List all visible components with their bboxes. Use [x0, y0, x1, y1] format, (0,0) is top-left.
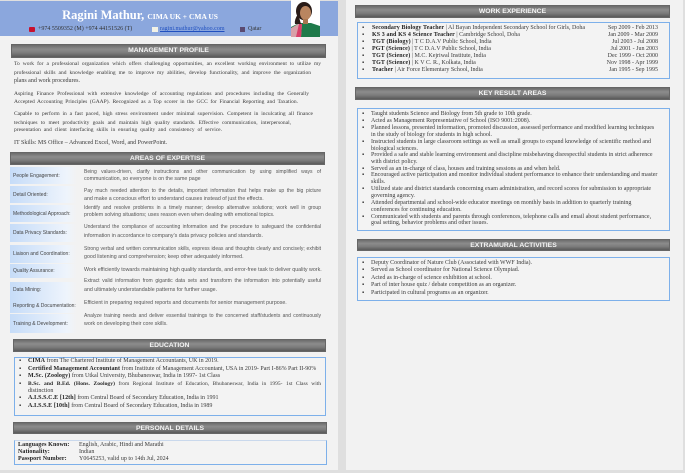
- expertise row: data privacy: [10, 224, 321, 242]
- panel: education list: [14, 357, 326, 416]
- panel: extramural list: [357, 257, 670, 301]
- expertise row: methodological approach: Identify and resolve problems in a timely manner; develop alternative solutions; work well in group: [84, 205, 321, 211]
- panel: key result areas list: Acted as Management Representative of School (ISO 9001:2008).: [371, 118, 530, 124]
- expertise row: training: work on developing their core skills.: [84, 321, 168, 327]
- contact phone: +974 5509352 (M) +974 44151526 (T): [38, 26, 132, 32]
- panel: key result areas list: Encouraged active participation and monitor individual student performance to enhance their understanding and master: [371, 172, 657, 178]
- panel: work experience list: Jan 1995 - Sep 1995: [609, 67, 658, 73]
- panel: work experience list: Teacher | Air Force Elementary School, India: [372, 67, 483, 73]
- panel: extramural list: Deputy Coordinator of Nature Club (Associated with WWF India).: [371, 260, 532, 266]
- panel: extramural list: Served as School coordinator for National Science Olympiad.: [371, 267, 519, 273]
- expertise row: data privacy: Understand the compliance of accounting information and the procedure to safeguard the confidential: [84, 224, 321, 230]
- text: profile: professional skills and knowledge enabling me to improve my abilities, develop functionality, and improve the organization: [14, 70, 311, 76]
- heading: education: EDUCATION: [150, 342, 189, 349]
- text: profile: plans and work procedures.: [14, 78, 80, 84]
- expertise row: detail oriented: [10, 186, 321, 203]
- panel: key result areas list: ▪: [362, 125, 364, 131]
- expertise row: detail oriented: Pay much needed attention to the details, important information that helps make up the big picture: [84, 188, 321, 194]
- text: profile: techniques to meet productivity goals and maintain high quality standards. Effective communication, interpersonal,: [14, 120, 291, 126]
- expertise row: data privacy: Data Privacy Standards:: [13, 230, 67, 236]
- text: profile: Aspiring Finance Professional with extensive knowledge of accounting regulations and procedures including the Generally: [14, 91, 309, 97]
- expertise row: quality assurance: [10, 264, 322, 278]
- panel: extramural list: ▪: [362, 290, 364, 296]
- heading: extramural activities: EXTRAMURAL ACTIVITIES: [470, 242, 557, 249]
- heading: work experience: [355, 5, 670, 18]
- expertise row: data mining: Data Mining:: [13, 287, 41, 293]
- panel: personal details: Passport Number:: [18, 456, 67, 462]
- panel: education list: distinction: [28, 388, 53, 394]
- panel: key result areas list: Utilized state and district standards concerning exam administration, and record scores for submission to appropriate: [371, 186, 651, 192]
- panel: key result areas list: ▪: [362, 139, 364, 145]
- portrait photo: [291, 0, 320, 37]
- heading: areas of expertise: [10, 152, 325, 165]
- panel: work experience list: ▪: [362, 39, 364, 45]
- panel: work experience list: TGT (Science) | M.C. Kejriwal Institute, India: [372, 53, 486, 59]
- expertise row: quality assurance: Quality Assurance:: [13, 268, 55, 274]
- panel: education list: ▪: [19, 395, 21, 401]
- heading: education: [13, 339, 326, 352]
- contact email: ragini.mathur@yahoo.com: [160, 26, 225, 32]
- expertise row: people engagement: People Engagement:: [13, 172, 60, 178]
- text: profile: presentation and client interfacing skills in ensuring quality and consistency of service.: [14, 127, 222, 133]
- text: profile: Capable to perform in a fast paced, high stress environment under minimal supervision. Competent in inculcating all finance: [14, 111, 313, 117]
- expertise row: quality assurance: Work efficiently towards maintaining high quality standards, and error-free task to deliver quality work.: [84, 267, 322, 273]
- panel: key result areas list: Served as an in-charge of class, houses and training sessions as and when held.: [371, 166, 560, 172]
- panel: key result areas list: Instructed students in large classroom settings as well as small groups to expand knowledge of scientific method and: [371, 139, 651, 145]
- expertise row: training: Analyze training needs and deliver essential trainings to the concerned staff/students and continuously: [84, 313, 321, 319]
- panel: education list: ▪: [19, 358, 21, 364]
- panel: key result areas list: with district policy.: [371, 159, 417, 165]
- expertise row: liaison: [10, 245, 321, 263]
- expertise row: people engagement: Being values-driven, clarify instructions and other communication by using simplified ways of: [84, 169, 321, 175]
- panel: work experience list: Jan 2009 - Mar 2009: [608, 32, 658, 38]
- panel: work experience list: TGT (Science) | K V C. R., Kolkata, India: [372, 60, 476, 66]
- expertise row: liaison: good listening and comprehension; keep other adequately informed.: [84, 254, 244, 260]
- panel: key result areas list: ▪: [362, 118, 364, 124]
- panel: work experience list: ▪: [362, 60, 364, 66]
- panel: work experience list: Dec 1999 - Oct 2000: [608, 53, 658, 59]
- panel: key result areas list: Provided a safe and stable learning environment and discipline misbehaving disrespectful students in strict adherence: [371, 152, 653, 158]
- panel: extramural list: Participated in cultural programs as an organizer.: [371, 290, 489, 296]
- panel: education list: ▪: [19, 403, 21, 409]
- expertise row: training: Training & Development:: [13, 320, 68, 326]
- panel: key result areas list: skills.: [371, 179, 385, 185]
- panel: personal details: Indian: [79, 449, 94, 455]
- page: left: [0, 1, 338, 470]
- text: profile: IT Skills: MS Office – Advanced Excel, Word, and PowerPoint.: [14, 140, 167, 146]
- expertise row: reporting: Efficient in preparing required reports and documents for senior management purpose.: [84, 300, 287, 306]
- expertise row: data mining: and ultimately understandable patterns for further usage.: [84, 287, 217, 293]
- panel: work experience list: PGT (Science) | T C D.A.V Public School, India: [372, 46, 491, 52]
- panel: work experience list: Jul 2003 - Jul 2008: [612, 39, 658, 45]
- expertise row: liaison: Liaison and Coordination:: [13, 251, 70, 257]
- expertise row: reporting: Reporting & Documentation:: [13, 302, 76, 308]
- expertise row: methodological approach: Methodological Approach:: [13, 210, 71, 216]
- panel: key result areas list: ▪: [362, 172, 364, 178]
- text: profile: [14, 61, 321, 146]
- panel: key result areas list: Communicated with students and parents through conferences, telephone calls and email about student performance,: [371, 214, 651, 220]
- panel: key result areas list: Taught students Science and Biology from 5th grade to 10th grade.: [371, 111, 532, 117]
- heading: management profile: MANAGEMENT PROFILE: [128, 47, 209, 54]
- panel: education list: B.Sc. and B.Ed. (Hons. Zoology) from Regional Institute of Education, Bhubaneswar, India in 1995- 1st Class with: [28, 381, 321, 387]
- panel: education list: Certified Management Accountant from Institute of Management Accountant, USA in 2019- Part I-86% Part II-90%: [28, 366, 316, 372]
- panel: work experience list: Sep 2009 - Feb 2013: [608, 25, 658, 31]
- panel: personal details: Y0645253, valid up to 14th Jul, 2024: [79, 456, 169, 462]
- panel: key result areas list: biological sciences.: [371, 146, 418, 152]
- panel: education list: M.Sc. (Zoology) from Utkal University, Bhubaneswar, India in 1997- 1st Class: [28, 373, 220, 379]
- name title: Ragini Mathur, CIMA UK + CMA US: [62, 8, 218, 22]
- panel: key result areas list: goal setting, behavior problems and other issues.: [371, 220, 488, 226]
- panel: key result areas list: [357, 108, 670, 231]
- panel: education list: A.I.S.S.C.E [12th] from Central Board of Secondary Education, India in 1991: [28, 395, 218, 401]
- panel: key result areas list: ▪: [362, 111, 364, 117]
- panel: key result areas list: ▪: [362, 214, 364, 220]
- expertise row: methodological approach: [10, 205, 321, 222]
- panel: education list: ▪: [19, 366, 21, 372]
- panel: key result areas list: in the study of biology for students in high school.: [371, 132, 492, 138]
- panel: personal details: English, Arabic, Hindi and Marathi: [79, 442, 164, 448]
- panel: key result areas list: Attended departmental and school-wide educator meetings on monthly basis in addition to quarterly training: [371, 200, 631, 206]
- icon: email: [152, 27, 158, 32]
- heading: extramural activities: [357, 239, 670, 251]
- panel: education list: CIMA from The Chartered Institute of Management Accountants, UK in 2019.: [28, 358, 219, 364]
- text: profile: To work for a professional organization which offers challenging opportunities, an excellent working environment to utilize my: [14, 61, 321, 67]
- heading: management profile: [11, 44, 326, 58]
- expertise row: liaison: Strong verbal and written communication skills, express ideas and thoughts clearly and concisely; exhibit: [84, 246, 321, 252]
- panel: personal details: Languages Known:: [18, 442, 69, 448]
- panel: work experience list: ▪: [362, 53, 364, 59]
- expertise row: data mining: Extract valid information from gigantic data sets and transform the information into potentially useful: [84, 278, 321, 284]
- panel: work experience list: ▪: [362, 46, 364, 52]
- panel: key result areas list: ▪: [362, 166, 364, 172]
- panel: work experience list: TGT (Biology) | T C D.A.V Public School, India: [372, 39, 492, 45]
- expertise row: data mining: [10, 278, 321, 298]
- header banner: [0, 1, 338, 36]
- panel: key result areas list: conferences for continuing education.: [371, 207, 462, 213]
- panel: work experience list: ▪: [362, 25, 364, 31]
- expertise row: methodological approach: problem solving situations; uses reason even when dealing with emotional topics.: [84, 212, 275, 218]
- text: profile: Accepted Accounting Principles (GAAP). Recognized as a Top scorer in the GCC for Financial Reporting and Taxation.: [14, 99, 298, 105]
- panel: personal details: Nationality:: [18, 449, 50, 455]
- panel: work experience list: [357, 22, 670, 79]
- icon: location: [240, 27, 245, 32]
- heading: personal details: [13, 422, 327, 434]
- panel: work experience list: Jul 2001 - Jun 2003: [611, 46, 658, 52]
- contact location: Qatar: [248, 26, 261, 32]
- panel: extramural list: ▪: [362, 282, 364, 288]
- panel: education list: A.I.S.S.E [10th] from Central Board of Secondary Education, India in 1989: [28, 403, 212, 409]
- expertise row: reporting: [10, 298, 287, 313]
- heading: key result areas: [355, 87, 670, 100]
- panel: key result areas list: Planned lessons, presented information, promoted discussion, assessed performance and modified learning techniques: [371, 125, 654, 131]
- expertise row: training: [10, 313, 321, 333]
- panel: key result areas list: ▪: [362, 152, 364, 158]
- expertise row: detail oriented: and make a conscious effort to understand causes instead of just the effects.: [84, 196, 264, 202]
- expertise row: people engagement: [10, 167, 321, 184]
- panel: education list: ▪: [19, 373, 21, 379]
- heading: areas of expertise: AREAS OF EXPERTISE: [130, 155, 205, 162]
- heading: work experience: WORK EXPERIENCE: [479, 8, 546, 15]
- panel: education list: ▪: [19, 381, 21, 387]
- panel: key result areas list: ▪: [362, 200, 364, 206]
- panel: extramural list: ▪: [362, 260, 364, 266]
- panel: work experience list: ▪: [362, 32, 364, 38]
- panel: personal details: [14, 440, 327, 465]
- panel: extramural list: ▪: [362, 275, 364, 281]
- panel: work experience list: Nov 1998 - Apr 1999: [607, 60, 658, 66]
- expertise row: people engagement: communication, so everyone is on the same page: [84, 176, 201, 182]
- panel: extramural list: Acted as in-charge of science exhibition at school.: [371, 275, 492, 281]
- panel: key result areas list: ▪: [362, 186, 364, 192]
- heading: personal details: PERSONAL DETAILS: [136, 425, 204, 432]
- page: right: [346, 0, 683, 470]
- panel: extramural list: Part of inter house quiz / debate competition as an organizer.: [371, 282, 516, 288]
- panel: work experience list: KS 3 and KS 4 Science Teacher | Cambridge School, Doha: [372, 32, 520, 38]
- panel: work experience list: Secondary Biology Teacher | Al Bayan Independent Secondary School for Girls, Doha: [372, 25, 585, 31]
- expertise row: data privacy: information in accordance to company’s data privacy policies and standards.: [84, 233, 263, 239]
- heading: key result areas: KEY RESULT AREAS: [479, 90, 546, 97]
- panel: work experience list: ▪: [362, 67, 364, 73]
- expertise row: detail oriented: Detail Oriented:: [13, 192, 48, 198]
- panel: extramural list: ▪: [362, 267, 364, 273]
- panel: key result areas list: governing agency.: [371, 193, 415, 199]
- icon: phone: [29, 27, 35, 32]
